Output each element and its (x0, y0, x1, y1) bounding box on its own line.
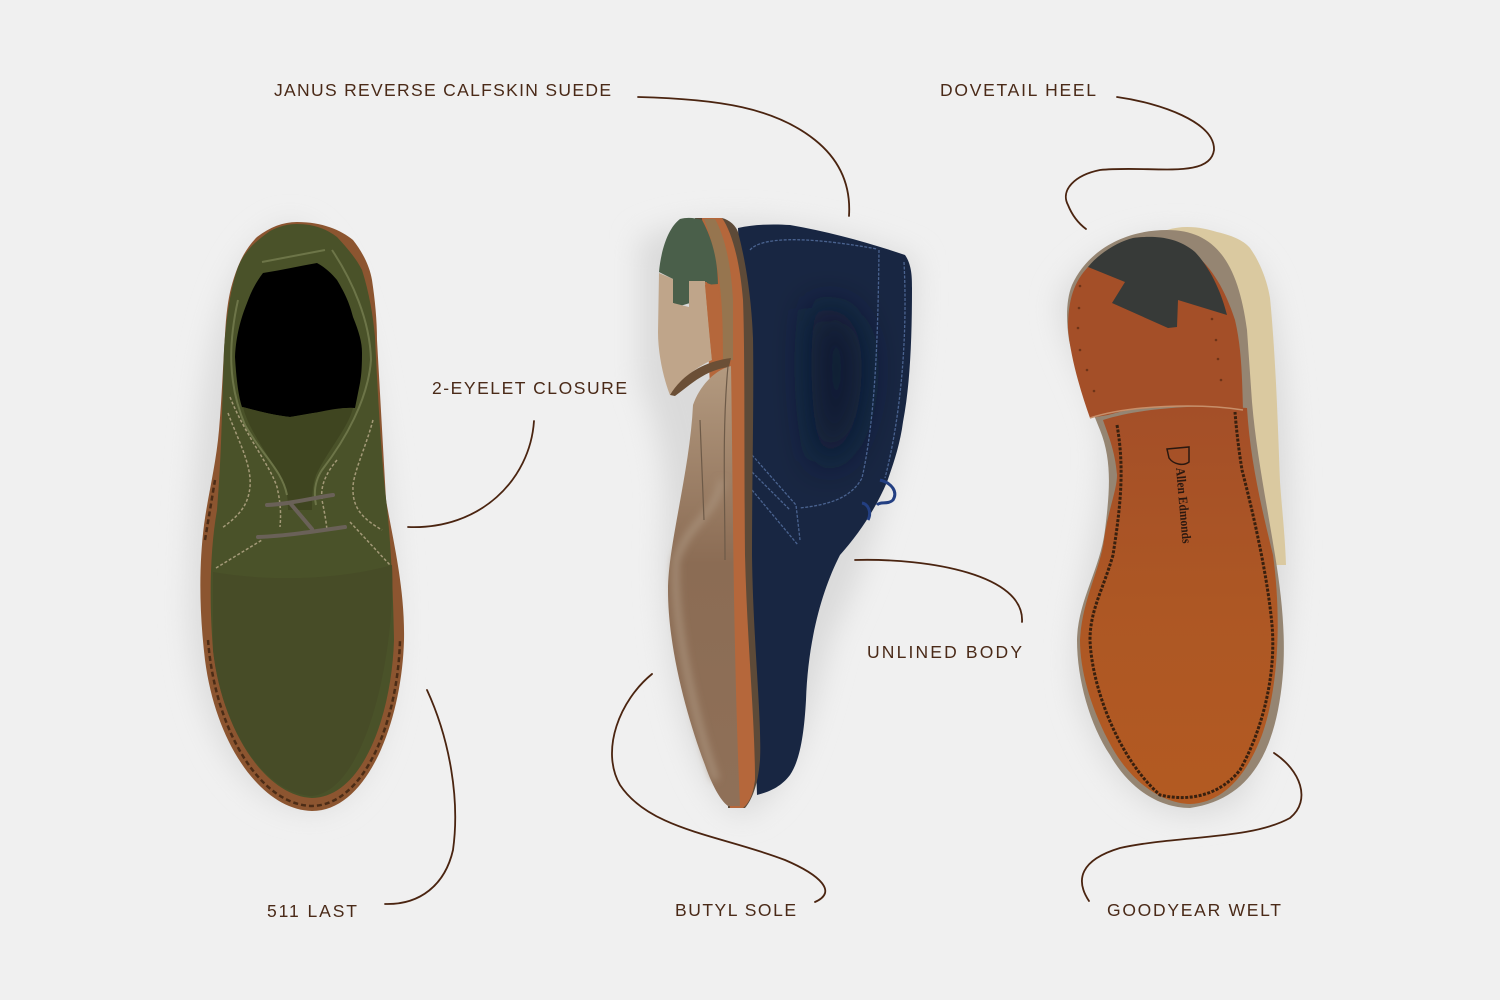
callout curve: sole (612, 674, 825, 902)
logo (1167, 447, 1195, 544)
leather sole (1080, 406, 1278, 804)
label: 511 last: 511 LAST (267, 901, 357, 921)
label: Janus reverse calfskin suede: JANUS REVERSE CALFSKIN SUEDE (274, 80, 611, 100)
callout curve: closure (408, 421, 534, 527)
suede dark patch (811, 308, 862, 465)
heel edge highlight (1090, 406, 1243, 418)
soft shadow (640, 223, 915, 815)
soft shadow (1060, 236, 1290, 814)
welt and outsole edge (200, 222, 404, 811)
callout curve: last (385, 690, 455, 904)
shoe: navy suede chukka, side view with sole (640, 218, 915, 815)
label: 2-eyelet closure: 2-EYELET CLOSURE (432, 378, 627, 398)
tan suede upper (1167, 227, 1286, 565)
toe shading (213, 565, 392, 796)
navy upper (738, 224, 912, 795)
leather heel (1068, 237, 1243, 418)
stitching (216, 397, 390, 568)
soft shadow (190, 225, 395, 810)
callout curve: body (855, 560, 1022, 622)
tan sole (668, 366, 740, 806)
tan midsole strip (704, 219, 733, 360)
heel nails (1077, 285, 1222, 392)
sole stitching (1090, 412, 1273, 798)
logo: Allen Edmonds (1173, 467, 1195, 544)
sole highlight (676, 480, 722, 780)
callout curve: heel (1066, 97, 1214, 229)
collar seam (231, 250, 371, 505)
rubber heel insert (1088, 237, 1227, 328)
lace loops (862, 480, 895, 520)
stitching (750, 240, 905, 545)
gray sole rim (1067, 230, 1284, 808)
shoe: green suede chukka, top view (190, 222, 404, 811)
heel orange strip (705, 284, 722, 360)
heel lip (670, 358, 731, 396)
laces (258, 495, 345, 537)
heel base plate (658, 273, 712, 395)
label: goodyear welt: GOODYEAR WELT (1107, 900, 1281, 920)
shoe: tan suede chukka, sole view (1060, 227, 1290, 814)
callout curve: suede (638, 97, 849, 216)
rubber heel insert (659, 218, 718, 306)
label: unlined body: UNLINED BODY (867, 642, 1022, 662)
label: butyl sole: BUTYL SOLE (675, 900, 796, 920)
callout curve: welt (1082, 753, 1301, 901)
suede upper (211, 224, 394, 798)
sole edge bands (695, 218, 760, 808)
welt stitching (205, 480, 400, 806)
collar opening (235, 263, 362, 417)
tongue (243, 407, 353, 510)
label: dovetail heel: DOVETAIL HEEL (940, 80, 1096, 100)
sole stitching (700, 366, 728, 560)
